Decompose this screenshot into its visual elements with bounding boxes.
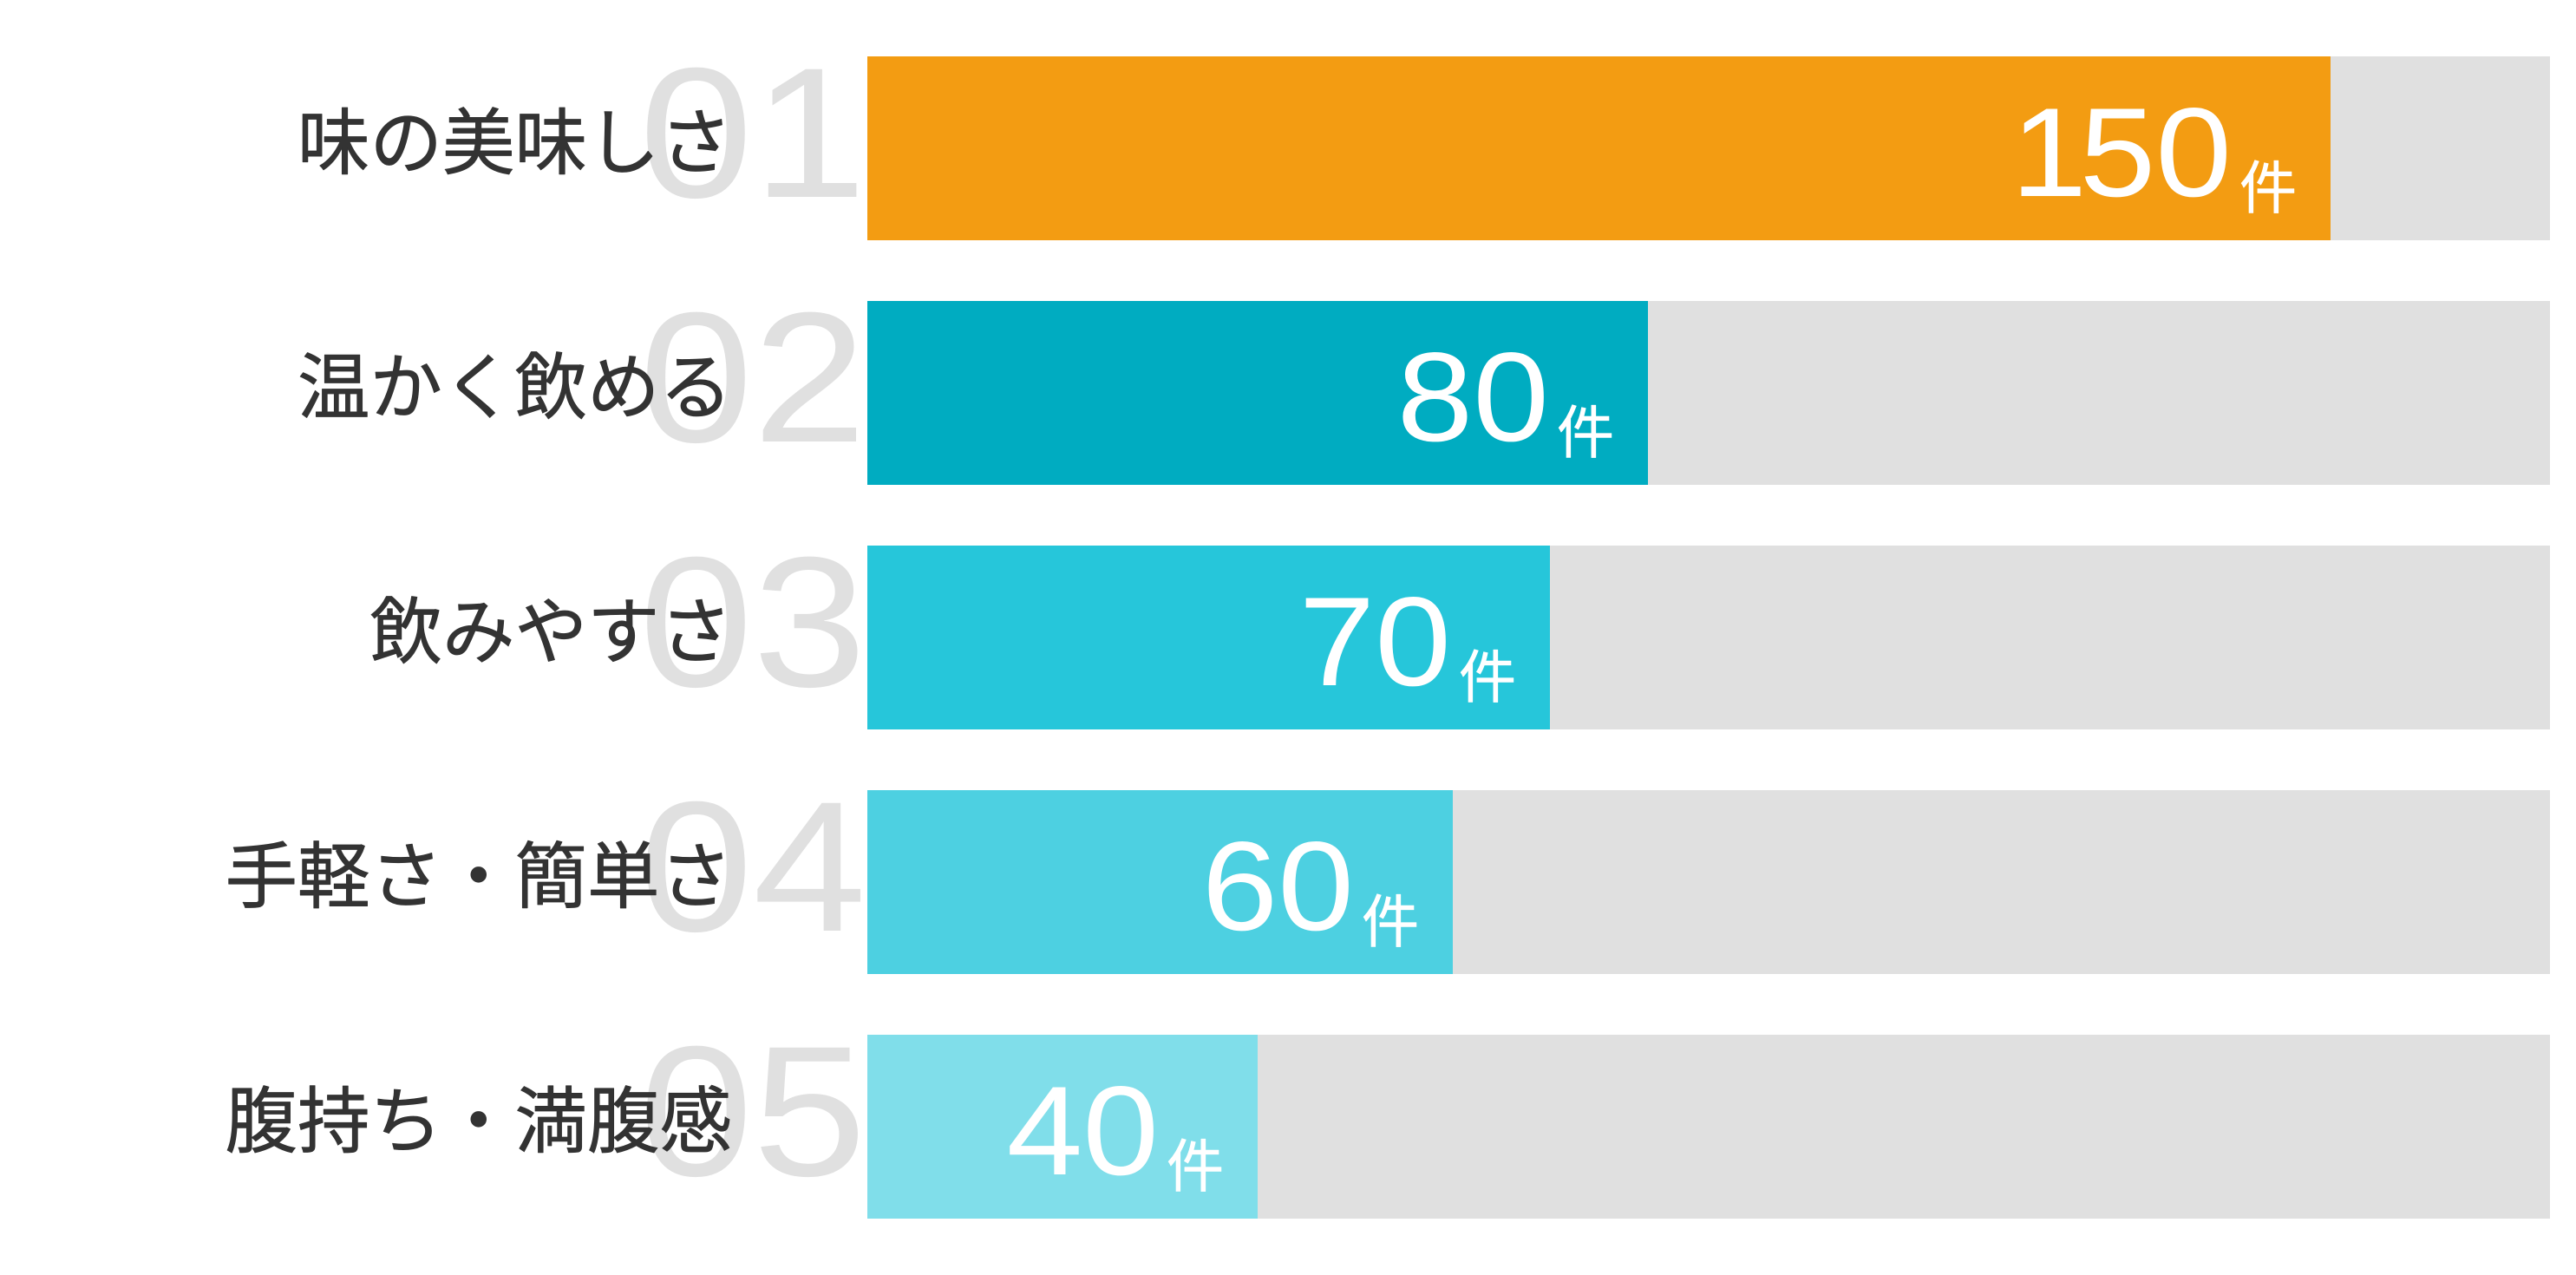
row 1: 味の美味しさ 150件 — [297, 29, 2550, 240]
label: 腹持ち・満腹感: 腹持ち・満腹感 — [226, 1081, 732, 1162]
row 2: 温かく飲める 80件 — [297, 273, 2550, 485]
bar track — [867, 546, 2550, 729]
unit 件: 件 — [2239, 156, 2297, 220]
row 3: 飲みやすさ 70件 — [369, 518, 2550, 729]
value 60: 60 — [1202, 815, 1354, 958]
unit 件: 件 — [1362, 890, 1419, 954]
bar fill 150 — [867, 56, 2331, 240]
unit 件: 件 — [1167, 1134, 1224, 1199]
rank number 01: 01 — [639, 29, 866, 237]
row 4: 手軽さ・簡単さ 60件 — [226, 762, 2550, 974]
rank number 04: 04 — [639, 762, 866, 971]
bar fill 60 — [867, 790, 1453, 974]
value 150: 150 — [2011, 82, 2232, 224]
label: 温かく飲める: 温かく飲める — [297, 347, 732, 428]
label: 手軽さ・簡単さ: 手軽さ・簡単さ — [226, 836, 732, 918]
value 70: 70 — [1299, 571, 1451, 713]
rank number 03: 03 — [639, 518, 866, 726]
label: 飲みやすさ: 飲みやすさ — [369, 592, 732, 673]
unit 件: 件 — [1557, 401, 1614, 465]
value 80: 80 — [1397, 326, 1549, 468]
label: 味の美味しさ: 味の美味しさ — [297, 102, 732, 184]
rank number 05: 05 — [639, 1007, 866, 1215]
bar track — [867, 56, 2550, 240]
rank number 02: 02 — [639, 273, 866, 481]
value 40: 40 — [1007, 1060, 1159, 1202]
bar track — [867, 1035, 2550, 1219]
bar track — [867, 301, 2550, 485]
bar fill 40 — [867, 1035, 1258, 1219]
bar fill 80 — [867, 301, 1648, 485]
unit 件: 件 — [1459, 645, 1516, 709]
bar track — [867, 790, 2550, 974]
bar fill 70 — [867, 546, 1550, 729]
row 5: 腹持ち・満腹感 40件 — [226, 1007, 2550, 1219]
